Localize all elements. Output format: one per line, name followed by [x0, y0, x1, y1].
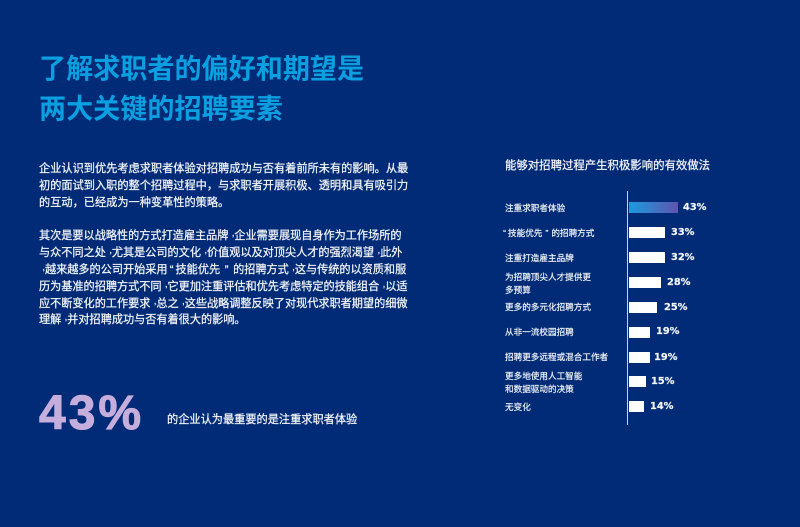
row: 注重求职者体验 43%: 43%: [683, 202, 706, 213]
row: 更多地使用人工智能和数据驱动的决策 15%: [505, 371, 674, 394]
stat caption: 的企业认为最重要的是注重求职者体验: [167, 414, 357, 426]
text block: employer brand paragraph: 与众不同之处 尤其是公司的文化 价值观以及对顶尖人才的强烈渴望 此外: [39, 247, 402, 259]
row: 从非一流校园招聘 19%: [505, 326, 680, 338]
text block: employer brand paragraph: [39, 228, 408, 326]
text block: employer brand paragraph: 应不断变化的工作要求 总之 这些战略调整反映了对现代求职者期望的细微: [39, 298, 408, 310]
row: 技能优先的招聘方式 33%: “: [503, 228, 506, 238]
title: [39, 53, 364, 124]
row: 技能优先的招聘方式 33%: 技能优先 的招聘方式: [508, 228, 594, 238]
row: 更多地使用人工智能和数据驱动的决策 15%: 15%: [651, 376, 674, 387]
text block: employer brand paragraph: ,: [42, 262, 45, 272]
row: 技能优先的招聘方式 33%: ”: [545, 228, 548, 238]
row: 技能优先的招聘方式 33%: 33%: [671, 227, 694, 238]
text block: employer brand paragraph: ,: [109, 245, 112, 255]
row: 无变化 14%: 无变化: [505, 402, 531, 412]
row: 更多的多元化招聘方式 25%: 25%: [664, 302, 687, 313]
text block: intro paragraph: 企业认识到优先考虑求职者体验对招聘成功与否有着前所未有的影响。从最: [39, 163, 408, 175]
row: 无变化 14%: [505, 401, 674, 412]
row: 更多地使用人工智能和数据驱动的决策 15%: 更多地使用人工智能: [505, 371, 582, 381]
row: 从非一流校园招聘 19%: 19%: [656, 326, 679, 337]
text block: employer brand paragraph: 其次是要以战略性的方式打造雇主品牌 企业需要展现自身作为工作场所的: [39, 230, 402, 242]
row: 更多地使用人工智能和数据驱动的决策 15%: 和数据驱动的决策: [505, 384, 574, 394]
axis line: [627, 191, 628, 425]
row: 注重打造雇主品牌 32%: [505, 252, 694, 263]
text block: intro paragraph: 初的面试到入职的整个招聘过程中，与求职者开展积极、透明和具有吸引力: [39, 180, 408, 192]
row: 注重求职者体验 43%: [505, 202, 706, 213]
row: 招聘更多远程或混合工作者 19%: 19%: [654, 352, 677, 363]
text block: employer brand paragraph: ,: [154, 296, 156, 306]
text block: employer brand paragraph: ,: [65, 312, 67, 322]
row: 更多的多元化招聘方式 25%: 更多的多元化招聘方式: [505, 302, 591, 312]
text block: employer brand paragraph: ,: [383, 279, 385, 289]
row: 为招聘顶尖人才提供更多预算 28%: 多预算: [505, 285, 531, 295]
chart heading: 能够对招聘过程产生积极影响的有效做法: [505, 160, 710, 172]
text block: employer brand paragraph: “: [170, 264, 173, 276]
text block: employer brand paragraph: ,: [165, 279, 168, 289]
row: 注重打造雇主品牌 32%: 32%: [671, 252, 694, 263]
row: 注重求职者体验 43%: 注重求职者体验: [505, 203, 565, 213]
row: 招聘更多远程或混合工作者 19%: [505, 352, 678, 363]
text block: employer brand paragraph: ,: [204, 245, 207, 255]
title: 了解求职者的偏好和期望是: [39, 53, 364, 84]
bar chart: [503, 191, 706, 425]
text block: employer brand paragraph: ,: [378, 245, 380, 255]
text block: employer brand paragraph: ,: [182, 296, 185, 306]
row: 更多的多元化招聘方式 25%: [505, 302, 688, 313]
title: 两大关键的招聘要素: [39, 93, 283, 124]
row: 招聘更多远程或混合工作者 19%: 招聘更多远程或混合工作者: [505, 352, 608, 362]
text block: intro paragraph: 的互动，已经成为一种变革性的策略。: [39, 197, 229, 209]
row: 为招聘顶尖人才提供更多预算 28%: 28%: [667, 277, 690, 288]
row: 注重打造雇主品牌 32%: 注重打造雇主品牌: [505, 253, 574, 263]
text block: intro paragraph: [39, 162, 408, 209]
text block: employer brand paragraph: 越来越多的公司开始采用 技能优先 的招聘方式 这与传统的以资质和服: [45, 264, 406, 276]
text block: employer brand paragraph: ,: [232, 228, 234, 238]
row: 技能优先的招聘方式 33%: [503, 227, 694, 238]
text block: employer brand paragraph: 理解 并对招聘成功与否有着很大的影响。: [39, 314, 246, 326]
text block: employer brand paragraph: ”: [225, 264, 228, 276]
row: 为招聘顶尖人才提供更多预算 28%: 为招聘顶尖人才提供更: [505, 272, 591, 282]
big stat: 43%: 43%: [39, 387, 144, 440]
row: 从非一流校园招聘 19%: 从非一流校园招聘: [505, 327, 574, 337]
text block: employer brand paragraph: 历为基准的招聘方式不同 它更加注重评估和优先考虑特定的技能组合 以适: [39, 281, 408, 293]
row: 为招聘顶尖人才提供更多预算 28%: [505, 272, 690, 295]
row: 无变化 14%: 14%: [650, 401, 673, 412]
text block: employer brand paragraph: ,: [292, 262, 295, 272]
